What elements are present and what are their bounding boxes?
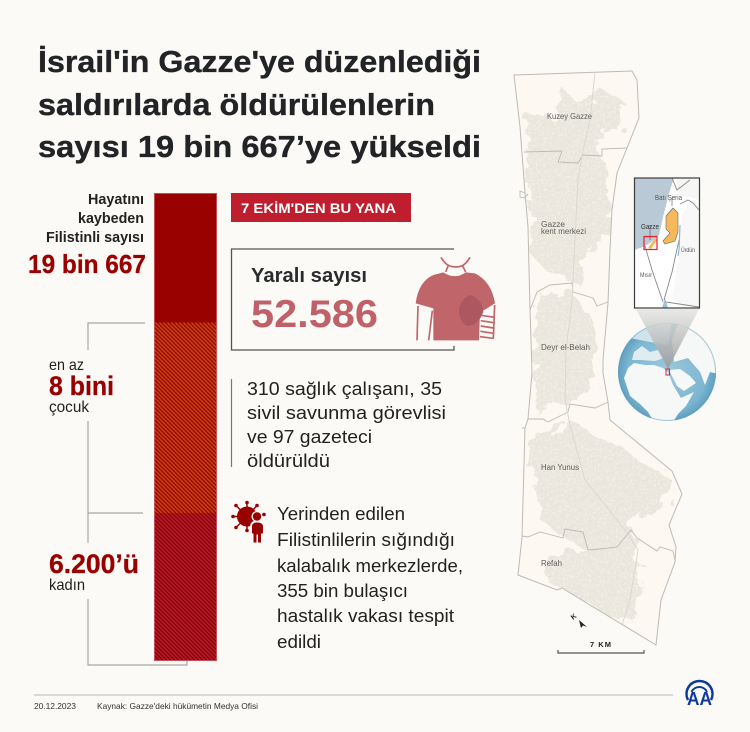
map labels	[541, 111, 592, 568]
banner: since October 7	[231, 193, 411, 222]
inset labels: Batı Şeria	[655, 193, 683, 202]
inset locator map	[634, 178, 700, 308]
icon: virus and person	[231, 501, 266, 542]
map labels: kent merkezi	[541, 226, 586, 236]
title	[38, 44, 481, 164]
zoom cone	[636, 309, 699, 369]
text block: health workers: sivil savunma görevlisi	[247, 403, 446, 423]
text block: infectious disease: hastalık vakası tespit	[277, 606, 454, 626]
map labels: Refah	[541, 558, 562, 568]
map labels: Gazze	[541, 219, 565, 229]
banner: since October 7: 7 EKİM'DEN BU YANA	[241, 201, 396, 216]
outline	[514, 71, 682, 645]
stacked bar: death toll	[154, 193, 217, 661]
text block: infectious disease: Filistinlilerin sığındığı	[277, 530, 455, 550]
Dead Sea and Jordan river	[678, 225, 680, 256]
text block: health workers: 310 sağlık çalışanı, 35	[247, 379, 442, 399]
logo: Anadolu Agency	[686, 681, 713, 709]
number: wounded: 52.586	[251, 293, 378, 336]
map: Gaza Strip	[514, 71, 682, 645]
text block: health workers: ve 97 gazeteci	[247, 427, 372, 447]
label: women	[49, 549, 139, 594]
main road	[565, 73, 638, 625]
icon: wounded torso	[416, 257, 495, 340]
Gulf of Aqaba	[662, 298, 668, 308]
title: sayısı 19 bin 667’ye yükseldi	[38, 129, 481, 164]
text block: infectious disease: Yerinden edilen	[277, 504, 405, 524]
icon: north arrow	[570, 613, 587, 628]
label: children: çocuk	[49, 399, 90, 416]
footer: date: 20.12.2023	[34, 701, 76, 711]
bracket lines	[88, 323, 187, 665]
label: total killed: Hayatını	[88, 191, 144, 208]
inset labels: Ürdün	[681, 247, 695, 254]
footer line	[34, 694, 673, 696]
map labels: Han Yunus	[541, 462, 579, 472]
map labels: Deyr el-Belah	[541, 342, 590, 352]
text block: infectious disease: kalabalık merkezlerde,	[277, 556, 463, 576]
text block: health workers: öldürüldü	[247, 451, 330, 471]
inset labels: Gazze	[641, 222, 659, 231]
panel: wounded	[232, 249, 495, 350]
globe	[618, 323, 716, 421]
text block: infectious disease	[277, 504, 463, 652]
icon: north arrow: K	[570, 613, 578, 622]
title: İsrail'in Gazze'ye düzenlediği	[38, 44, 481, 79]
logo: Anadolu Agency: AA	[687, 689, 712, 709]
inset labels: Mısır	[640, 273, 652, 279]
scale bar	[558, 640, 644, 653]
label: total killed: Filistinli sayısı	[46, 229, 144, 246]
label: children: en az	[49, 357, 84, 374]
text block: infectious disease: 355 bin bulaşıcı	[277, 581, 408, 601]
footer: source: Kaynak: Gazze'deki hükümetin Medya Ofisi	[97, 701, 258, 711]
West Bank	[663, 208, 678, 244]
icon: globe marker	[666, 369, 670, 375]
governorate borders	[520, 148, 675, 560]
land tint	[676, 179, 698, 200]
red marker	[644, 236, 657, 250]
scale bar: 7 KM	[590, 640, 611, 649]
text block: health workers	[232, 379, 446, 471]
label: total killed: kaybeden	[78, 210, 144, 227]
label: total killed: 19 bin 667	[28, 249, 146, 279]
heading: wounded: Yaralı sayısı	[251, 265, 367, 287]
Gaza	[648, 238, 657, 249]
text block: infectious disease: edildi	[277, 632, 321, 652]
title: saldırılarda öldürülenlerin	[38, 87, 435, 122]
label: women: 6.200’ü	[49, 549, 139, 579]
label: total killed	[28, 191, 146, 279]
label: children: 8 bini	[49, 371, 114, 401]
label: women: kadın	[49, 577, 85, 594]
sea	[634, 178, 674, 250]
map labels: Kuzey Gazze	[547, 111, 592, 121]
label: children	[49, 357, 114, 416]
borders	[645, 178, 699, 307]
inset labels	[640, 193, 695, 279]
